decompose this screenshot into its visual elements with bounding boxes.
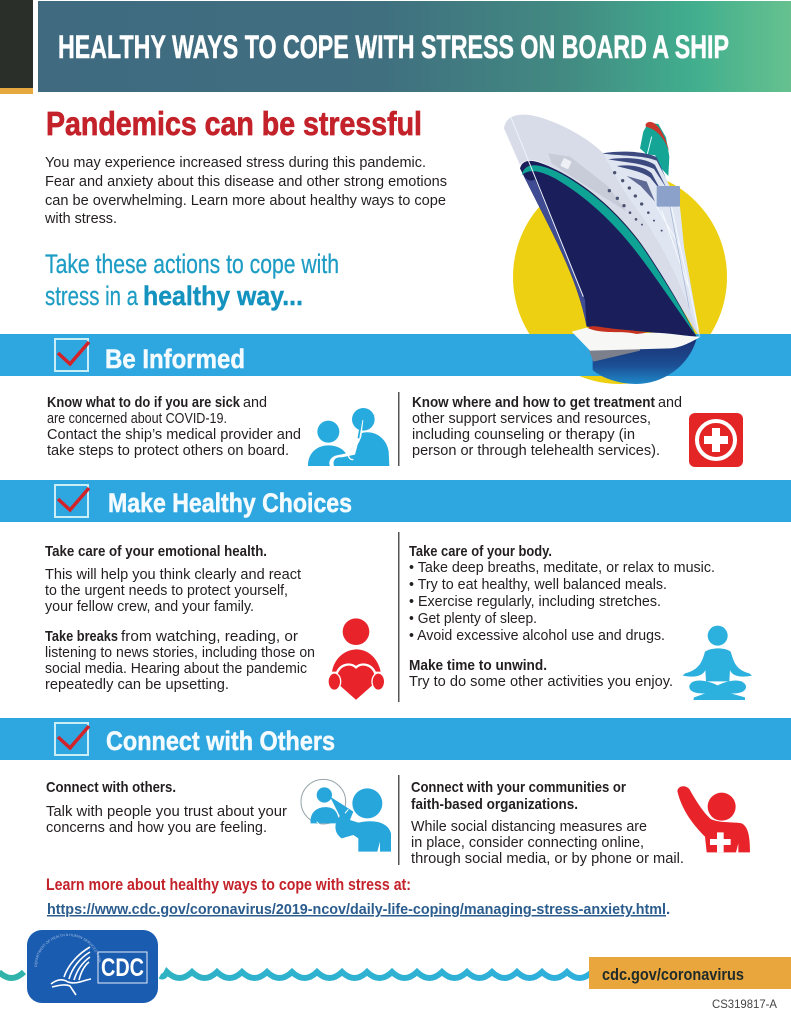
section band: connect with others (0, 718, 791, 760)
panel: connect with others content (46, 775, 750, 867)
text: if you are sick (47, 394, 301, 459)
text: communities or faith-based organizations: While social distancing measures are (411, 818, 647, 835)
icon: doctor with stethoscope and patient (308, 408, 389, 466)
heading: connect with others: Connect with Others (106, 726, 335, 756)
intro text: with stress. (44, 210, 117, 227)
text: take breaks: Take breaks (45, 628, 118, 645)
text: where to get treatment: Know where and how to get treatment (412, 394, 655, 411)
icon: person hugging heart (328, 618, 385, 701)
text: communities or faith-based organizations: in place, consider connecting online, (411, 834, 644, 851)
text: make time to unwind: Make time to unwind. (409, 657, 547, 674)
text: emotional health: to the urgent needs to protect yourself, (45, 582, 288, 599)
text: emotional health: This will help you think clearly and react (45, 566, 302, 583)
heading: make healthy choices: Make Healthy Choices (108, 488, 352, 518)
text: take care of your body: Take care of your body. (409, 543, 552, 560)
text: connect with others (46, 779, 287, 836)
text: connect with others: Connect with others. (46, 779, 176, 796)
text: if you are sick: are concerned about COVID-19. (47, 410, 227, 427)
text: communities or faith-based organizations: through social media, or by phone or mail. (411, 850, 684, 867)
text: take care of your body: • Exercise regularly, including stretches. (409, 593, 661, 610)
illustration: sun behind ship (513, 170, 727, 384)
link: cdc coping url: https://www.cdc.gov/coronavirus/2019-ncov/daily-life-coping/managing-stress-anxiety.html (47, 901, 666, 918)
panel: be informed content (47, 392, 743, 467)
text: where to get treatment: and (658, 394, 682, 411)
text: take breaks: listening to news stories, including those on (45, 644, 315, 661)
icon: meditating person (683, 626, 752, 700)
section band: make healthy choices (0, 480, 791, 522)
decorative wave line (0, 972, 592, 978)
section band: be informed (0, 334, 791, 376)
text: if you are sick: Contact the ship’s medical provider and (47, 426, 301, 443)
text: make time to unwind (409, 657, 673, 690)
intro text: You may experience increased stress during this pandemic. (45, 154, 426, 171)
header banner (0, 0, 791, 94)
heading: pandemics can be stressful: Pandemics can be stressful (46, 105, 422, 142)
icon: red medical cross (689, 413, 743, 467)
text: if you are sick: and (243, 394, 267, 411)
publication code: CS319817-A (712, 997, 777, 1011)
intro text: Fear and anxiety about this disease and other strong emotions (45, 173, 447, 190)
learn more heading: Learn more about healthy ways to cope with stress at: (46, 875, 411, 894)
text: take breaks: from watching, reading, or (121, 628, 298, 645)
intro text (44, 154, 447, 227)
text: take care of your body: • Avoid excessive alcohol use and drugs. (409, 627, 665, 644)
panel: make healthy choices content (45, 532, 752, 702)
text: where to get treatment: other support services and resources, (412, 410, 651, 427)
text: connect with others: Talk with people you trust about your (46, 803, 287, 820)
intro text: can be overwhelming. Learn more about healthy ways to cope (45, 192, 446, 209)
text: emotional health (45, 543, 302, 615)
link: cdc coping url: . (666, 901, 670, 918)
call to action subheading: Take these actions to cope with (45, 249, 339, 279)
text: communities or faith-based organizations (411, 779, 684, 867)
text: take care of your body (409, 543, 715, 644)
call to action subheading: stress in a (45, 281, 139, 311)
text: take breaks (45, 628, 315, 693)
illustration: cruise ship (504, 115, 701, 384)
icon: people talking by phone (301, 779, 391, 852)
divider (398, 392, 400, 466)
text: if you are sick: take steps to protect others on board. (47, 442, 289, 459)
icon: person raising hand (677, 786, 750, 852)
logo: cdc (27, 930, 158, 1003)
logo: cdc: DEPARTMENT OF HEALTH & HUMAN SERVICES • USA (34, 934, 101, 967)
call to action subheading (45, 249, 339, 311)
text: communities or faith-based organizations: Connect with your communities or (411, 779, 626, 796)
text: communities or faith-based organizations: faith-based organizations. (411, 796, 578, 813)
call to action subheading: healthy way... (143, 281, 303, 311)
icon: checkbox (55, 485, 89, 517)
icon: checkbox (55, 339, 89, 371)
text: where to get treatment: person or through telehealth services). (412, 442, 660, 459)
text: where to get treatment (412, 394, 682, 459)
logo: cdc: CDC (101, 954, 144, 982)
footer link bar: cdc.gov/coronavirus (602, 965, 744, 984)
heading: be informed: Be Informed (105, 344, 245, 374)
divider (398, 775, 400, 865)
text: make time to unwind: Try to do some other activities you enjoy. (409, 673, 673, 690)
footer link bar (589, 957, 791, 989)
icon: checkbox (55, 723, 89, 755)
text: emotional health: your fellow crew, and your family. (45, 598, 254, 615)
text: emotional health: Take care of your emotional health. (45, 543, 267, 560)
text: take care of your body: • Try to eat healthy, well balanced meals. (409, 576, 667, 593)
divider (398, 532, 400, 702)
text: if you are sick: Know what to do if you are sick (47, 394, 241, 411)
text: where to get treatment: including counseling or therapy (in (412, 426, 635, 443)
text: take care of your body: • Get plenty of sleep. (409, 610, 537, 627)
text: take breaks: social media. Hearing about the pandemic (45, 660, 307, 677)
text: take breaks: repeatedly can be upsetting. (45, 676, 229, 693)
text: connect with others: concerns and how you are feeling. (46, 819, 267, 836)
text: take care of your body: • Take deep breaths, meditate, or relax to music. (409, 559, 715, 576)
